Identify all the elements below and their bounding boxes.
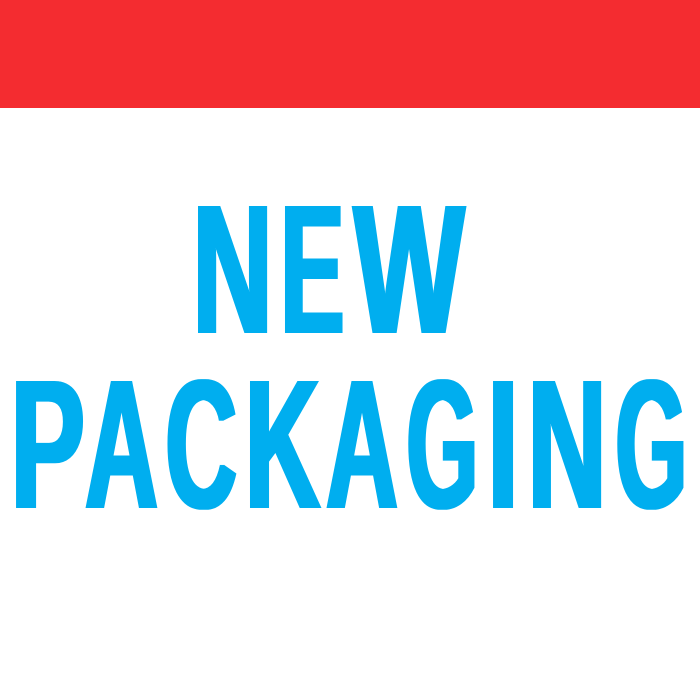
heading line: NEW: E — [281, 167, 344, 373]
heading line: PACKAGING: C — [165, 342, 237, 548]
red top banner — [0, 0, 700, 108]
heading line: NEW — [193, 166, 465, 373]
heading line: NEW: N — [193, 167, 273, 373]
heading line: PACKAGING: G — [616, 341, 687, 547]
heading line: NEW: W — [354, 166, 465, 372]
heading line: PACKAGING: A — [85, 341, 158, 548]
heading line: PACKAGING: N — [528, 342, 606, 548]
heading line: PACKAGING — [11, 341, 687, 548]
heading line: PACKAGING: G — [406, 341, 478, 547]
heading line: PACKAGING: P — [11, 342, 85, 548]
heading line: PACKAGING: K — [245, 341, 320, 547]
heading line: PACKAGING: A — [326, 342, 398, 548]
heading line: PACKAGING: I — [488, 342, 518, 548]
